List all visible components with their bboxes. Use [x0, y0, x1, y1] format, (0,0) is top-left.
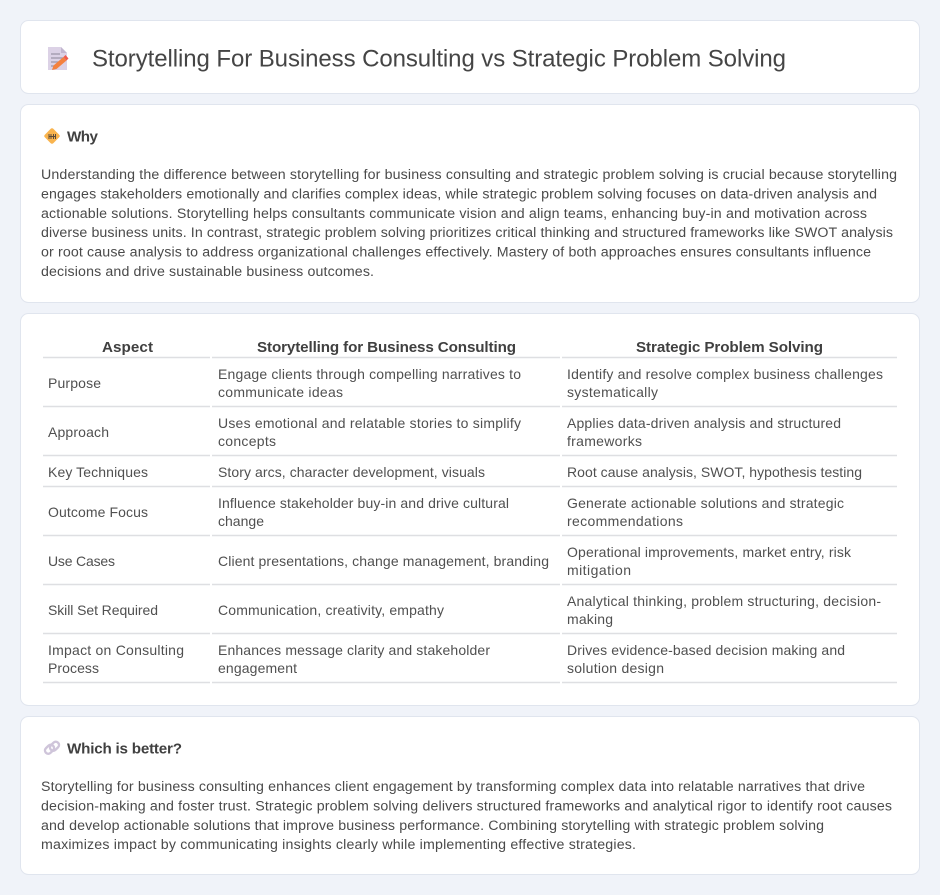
text block: why paragraph: or root cause analysis to address organizational challenges effectively. Mastery of both approaches ensures consultants influence	[41, 245, 871, 261]
row: impact on consulting process: Drives evidence-based decision making and	[567, 642, 845, 658]
table header: Strategic Problem Solving	[636, 339, 823, 356]
row: approach	[48, 415, 841, 449]
icon: chain link	[44, 740, 60, 755]
row: purpose	[48, 366, 883, 400]
text block: why paragraph: diverse business units. In contrast, strategic problem solving prioritizes critical thinking and structured frameworks like SWOT analysis	[41, 225, 893, 241]
table header: Storytelling for Business Consulting	[257, 339, 516, 356]
row: outcome focus: Generate actionable solutions and strategic	[567, 495, 844, 511]
panel: comparison table	[20, 314, 920, 706]
row: use cases: Client presentations, change management, branding	[218, 553, 549, 569]
icon: diamond sign	[44, 128, 60, 144]
heading: why: Why	[67, 128, 99, 146]
row: outcome focus: Influence stakeholder buy-in and drive cultural	[218, 495, 509, 511]
panel: why	[20, 104, 920, 302]
row: key techniques: Story arcs, character development, visuals	[218, 464, 485, 480]
text block: why paragraph: Understanding the difference between storytelling for business consulting and strategic problem solving is crucial because storytelling	[41, 167, 897, 183]
row: purpose: Identify and resolve complex business challenges	[567, 366, 883, 382]
text block: which is better paragraph: and develop actionable solutions that improve business performance. Combining storytelling with strategic problem solving	[41, 818, 824, 834]
table header: Aspect	[102, 339, 153, 356]
row: outcome focus: change	[218, 513, 264, 529]
heading: which is better: Which is better?	[67, 740, 182, 758]
text block: why paragraph: decisions and drive sustainable business outcomes.	[41, 264, 374, 280]
panel: which is better	[20, 716, 920, 874]
row: skill set required: Analytical thinking, problem structuring, decision-	[567, 593, 881, 609]
row: purpose: Engage clients through compelling narratives to	[218, 366, 521, 382]
text block: which is better paragraph: Storytelling for business consulting enhances client engagement by transforming complex data into relatable narratives that drive	[41, 779, 865, 795]
row: purpose: Purpose	[48, 375, 101, 391]
row: purpose: systematically	[567, 384, 658, 400]
row: impact on consulting process: Impact on Consulting	[48, 642, 184, 658]
row: approach: Applies data-driven analysis and structured	[567, 415, 841, 431]
icon: document with pencil	[48, 47, 68, 70]
row: impact on consulting process: engagement	[218, 660, 297, 676]
text block: why paragraph: engages stakeholders emotionally and clarifies complex ideas, while strategic problem solving focuses on data-driven analysis and	[41, 186, 877, 202]
panel: title card	[20, 20, 920, 94]
row: use cases: Use Cases	[48, 553, 115, 569]
text block: which is better paragraph: maximizes impact by communicating insights clearly while implementing effective strategies.	[41, 837, 636, 853]
text block: why paragraph: actionable solutions. Storytelling helps consultants communicate vision and align teams, enhancing buy-in and motivation across	[41, 206, 867, 222]
row: key techniques: Root cause analysis, SWOT, hypothesis testing	[567, 464, 862, 480]
title: Storytelling For Business Consulting vs Strategic Problem Solving	[92, 46, 786, 72]
row: use cases: Operational improvements, market entry, risk	[567, 544, 852, 560]
row: outcome focus: recommendations	[567, 513, 683, 529]
row: approach: Uses emotional and relatable stories to simplify	[218, 415, 521, 431]
row: approach: concepts	[218, 433, 276, 449]
row: use cases	[48, 544, 852, 578]
row: skill set required: Communication, creativity, empathy	[218, 602, 444, 618]
row: key techniques	[48, 464, 862, 480]
row: outcome focus: Outcome Focus	[48, 504, 148, 520]
row: skill set required: making	[567, 611, 613, 627]
text block: which is better paragraph	[41, 779, 892, 853]
row: approach: frameworks	[567, 433, 642, 449]
row: impact on consulting process: Process	[48, 660, 99, 676]
row: impact on consulting process: solution design	[567, 660, 664, 676]
row: skill set required	[48, 593, 881, 627]
row: outcome focus	[48, 495, 844, 529]
row: purpose: communicate ideas	[218, 384, 343, 400]
text block: why paragraph	[41, 167, 897, 280]
row: approach: Approach	[48, 424, 109, 440]
row: impact on consulting process	[48, 642, 845, 676]
row: key techniques: Key Techniques	[48, 464, 148, 480]
table header	[102, 339, 823, 356]
text block: which is better paragraph: decision-making and foster trust. Strategic problem solving delivers structured frameworks and analytical rigor to identify root causes	[41, 798, 892, 814]
row: impact on consulting process: Enhances message clarity and stakeholder	[218, 642, 490, 658]
row: use cases: mitigation	[567, 562, 631, 578]
row: skill set required: Skill Set Required	[48, 602, 158, 618]
